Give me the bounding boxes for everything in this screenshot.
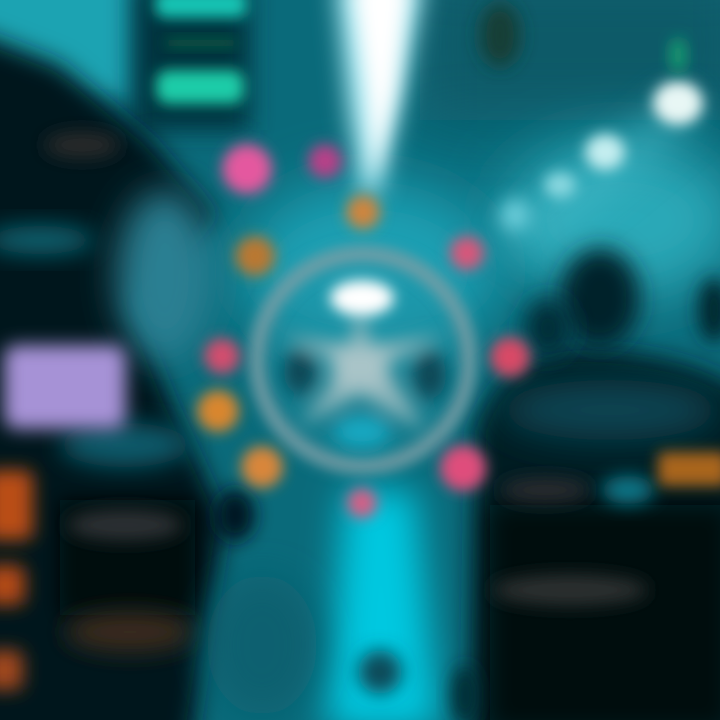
node: orange top	[346, 195, 380, 229]
right dark mass: silhouette	[470, 248, 720, 720]
node: rose left	[204, 338, 240, 374]
left dark mass	[0, 30, 225, 720]
ring inner star	[280, 300, 446, 448]
node: pink right top	[450, 236, 484, 270]
node: orange bottom left	[241, 446, 283, 488]
orange bars, left edge	[0, 470, 33, 690]
background glows	[0, 0, 720, 360]
central ring	[255, 252, 471, 468]
node: pink bottom	[347, 488, 377, 518]
node: orange lower left	[197, 390, 239, 432]
node: rose right	[490, 337, 530, 377]
purple panel	[4, 345, 126, 429]
node: orange left	[235, 236, 275, 276]
bottom center glow	[207, 489, 478, 720]
white light beam	[335, 0, 425, 195]
green top labels	[155, 0, 247, 104]
node: pink bottom right	[440, 445, 486, 491]
top dark accent	[480, 3, 520, 67]
node: pink large	[222, 144, 272, 194]
node: pink small	[308, 144, 342, 178]
light streak: upper right nodes	[500, 37, 703, 260]
